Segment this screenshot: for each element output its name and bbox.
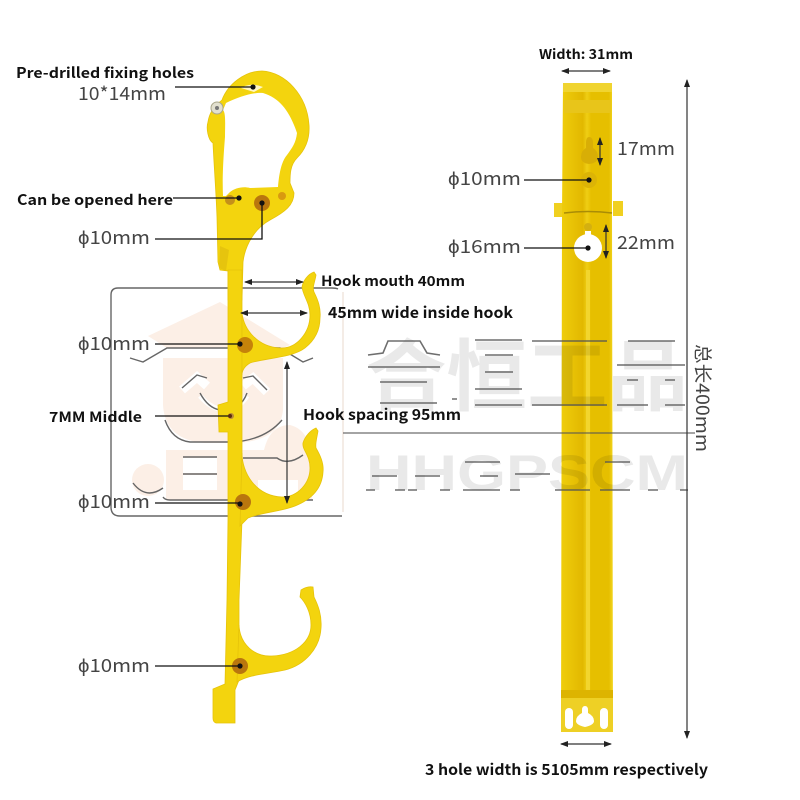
label: hook mouth: Hook mouth 40mm [321, 271, 465, 291]
label: fixing holes [16, 62, 256, 106]
label: 22mm [606, 225, 675, 258]
watermark text: Chinese: 合恒工品 [366, 315, 688, 427]
spine [213, 270, 242, 723]
label: third hook hole [78, 652, 243, 678]
logo truck [166, 425, 312, 500]
hook holes [237, 337, 253, 353]
label: three hole width: 3 hole width is 5105mm respectively [425, 759, 708, 780]
screw [211, 102, 223, 114]
label: inside hook width: 45mm wide inside hook [328, 301, 514, 323]
label: second hook hole: ϕ10mm [78, 488, 150, 514]
label: fixing holes: 10*14mm [78, 80, 166, 106]
label: hook spacing: Hook spacing 95mm [303, 404, 461, 425]
label: can be opened [17, 189, 242, 210]
top clip [207, 71, 309, 300]
hook 2 [240, 428, 323, 526]
hook 3 [237, 587, 321, 682]
label: second hook hole [78, 488, 243, 514]
label: fixing holes: Pre-drilled fixing holes [16, 62, 194, 83]
dimension: total length: 总长400mm [690, 344, 716, 452]
watermark text: Latin: HHGPSCM [366, 445, 688, 501]
label: 22mm: 22mm [617, 229, 675, 255]
label: 7MM middle: 7MM Middle [49, 407, 142, 427]
large keyhole [574, 234, 602, 262]
label: third hook hole: ϕ10mm [78, 652, 150, 678]
logo face [163, 358, 283, 443]
label: small hole 10mm [448, 165, 592, 191]
label: top hole 10mm [78, 200, 265, 250]
label: first hook hole [78, 330, 243, 356]
watermark logo [111, 288, 343, 516]
bottom slots [565, 708, 573, 729]
left hook product [207, 71, 323, 723]
watermark edge lines [343, 340, 695, 490]
top holes [254, 195, 270, 211]
label: first hook hole: ϕ10mm [78, 330, 150, 356]
label: width 31mm [539, 43, 633, 71]
hook 1 [242, 272, 320, 375]
label: 17mm [600, 135, 675, 165]
logo roof [148, 302, 290, 348]
right strap product [554, 83, 623, 732]
label: can be opened: Can be opened here [17, 189, 173, 210]
label: big hole 16mm: ϕ16mm [448, 233, 521, 259]
label: 17mm: 17mm [617, 135, 675, 161]
label: small hole 10mm: ϕ10mm [448, 165, 521, 191]
keyhole slot [581, 137, 598, 164]
label: 7MM middle [49, 407, 232, 427]
label: width 31mm: Width: 31mm [539, 43, 633, 63]
label: top hole 10mm: ϕ10mm [78, 224, 150, 250]
label: big hole 16mm [448, 233, 591, 259]
small fixing hole [581, 172, 597, 188]
